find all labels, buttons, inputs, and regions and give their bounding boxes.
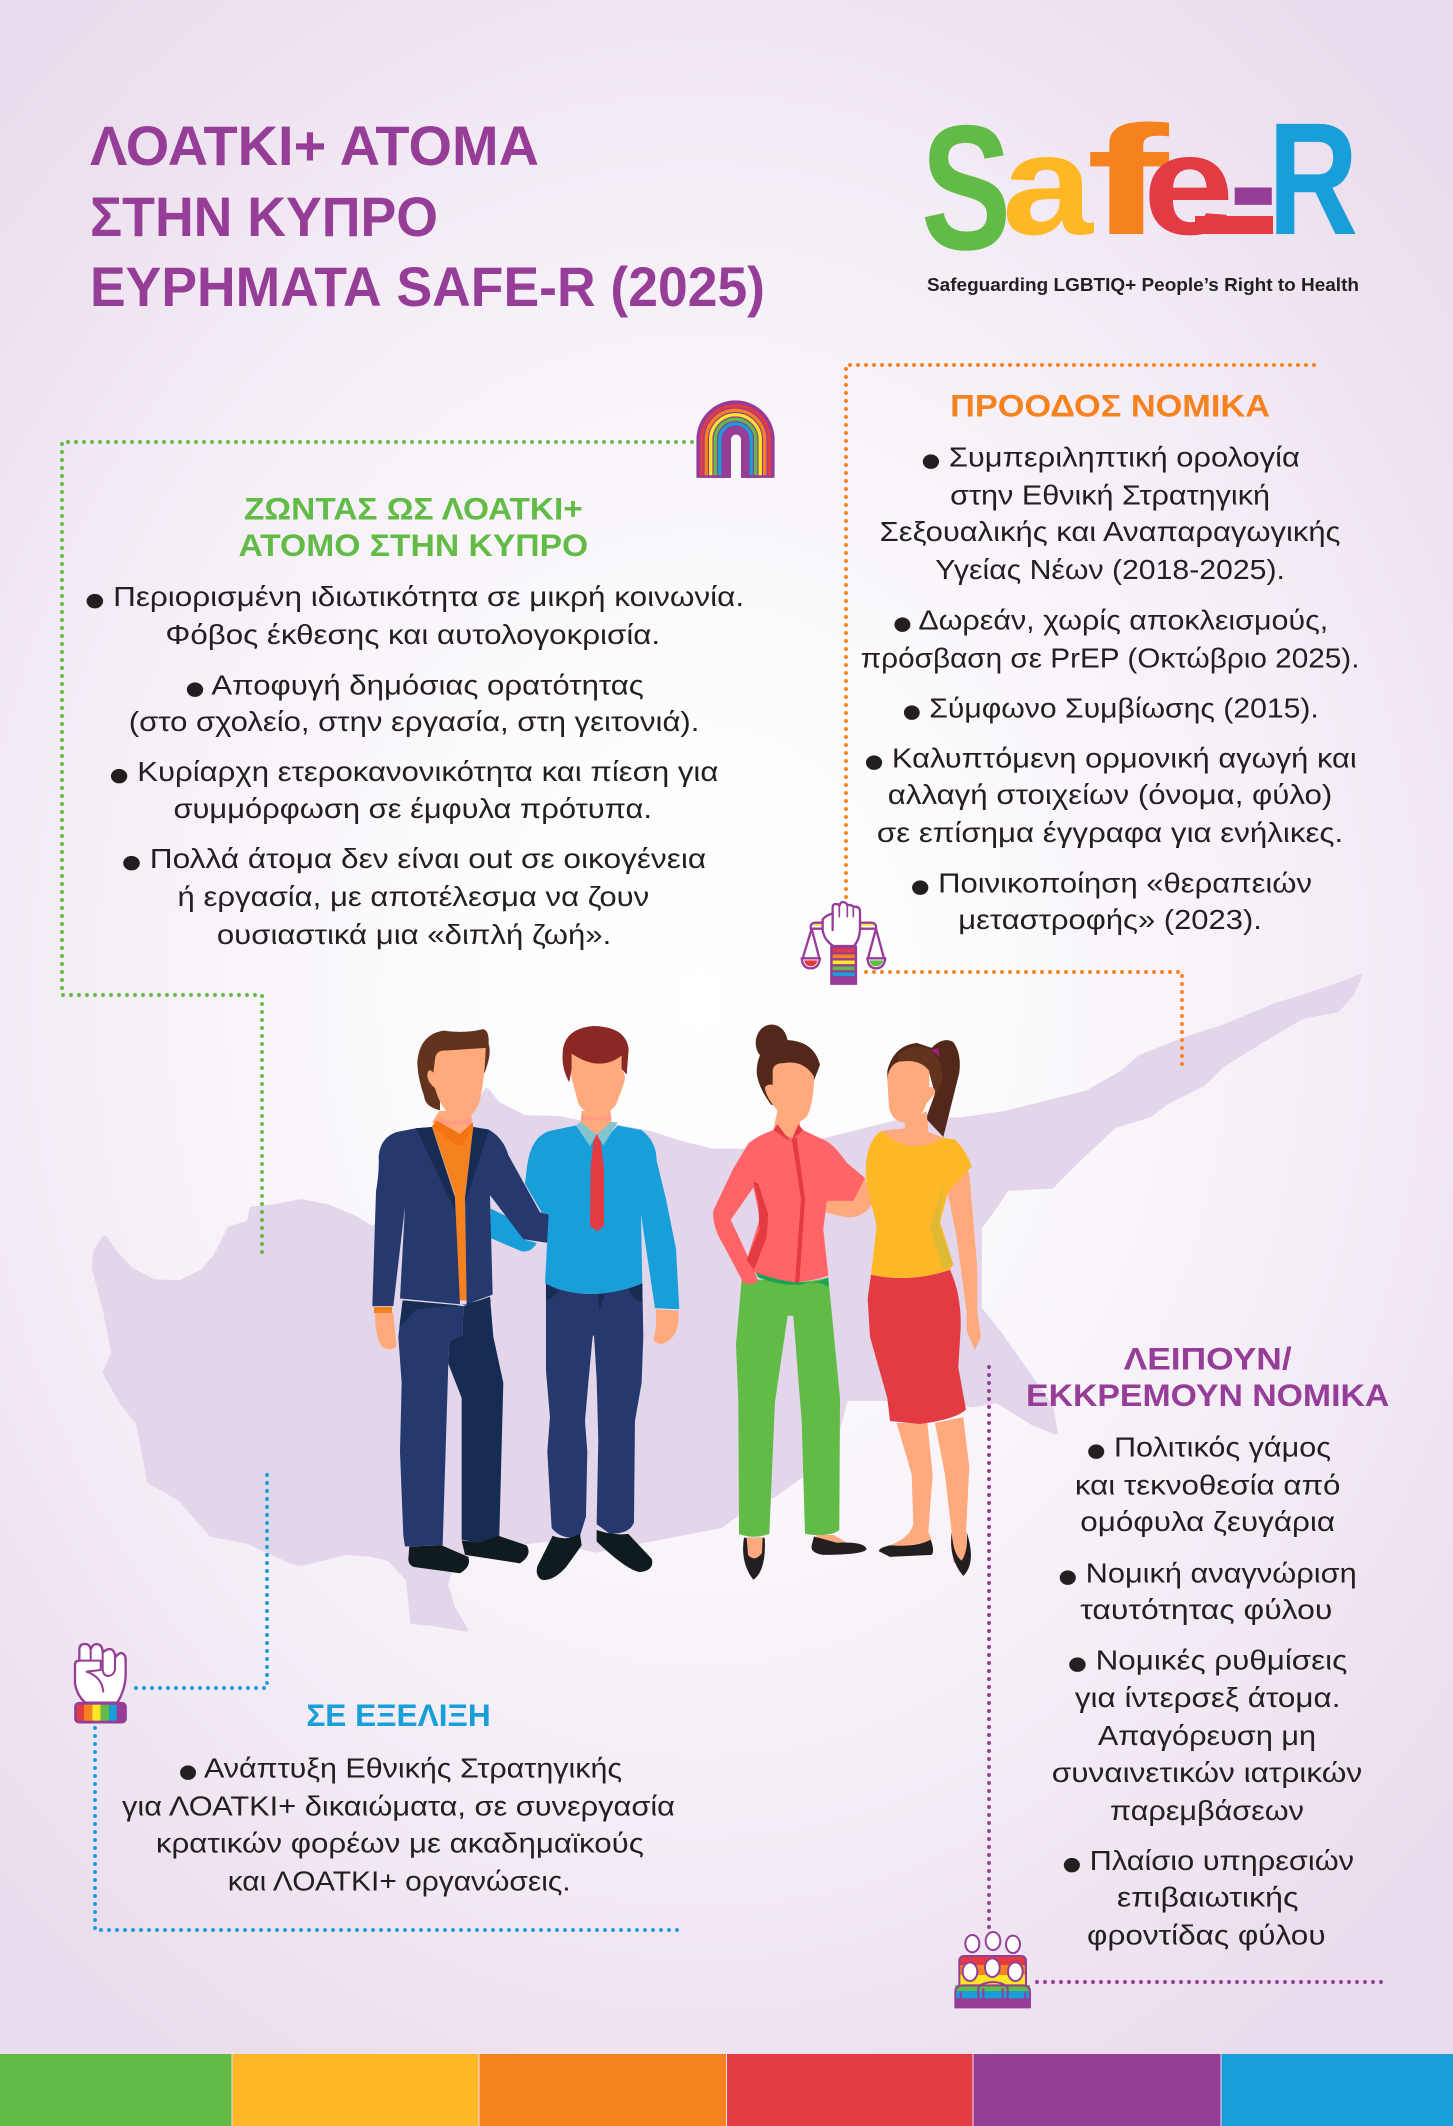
bullet list: missing or pending: και τεκνοθεσία από (1075, 1469, 1340, 1500)
heading: legal progress: ΠΡΟΟΔΟΣ ΝΟΜΙΚΑ (950, 387, 1270, 423)
bullet list: legal progress: Σεξουαλικής και Αναπαραγωγικής (880, 516, 1340, 547)
bullet list: missing or pending: ομόφυλα ζευγάρια (1080, 1506, 1335, 1537)
bullet list: legal progress: σε επίσημα έγγραφα για ενήλικες. (877, 817, 1343, 848)
bullet list: legal progress: πρόσβαση σε PrEP (Οκτώβριο 2025). (861, 642, 1359, 673)
title (90, 115, 765, 318)
bullet list: legal progress: ● Καλυπτόμενη ορμονική αγωγή και (865, 743, 1357, 774)
bullet list: living as LGBTIQ+: συμμόρφωση σε έμφυλα πρότυπα. (173, 793, 652, 824)
bullet list: legal progress: στην Εθνική Στρατηγική (950, 480, 1270, 511)
heading: living as LGBTIQ+: ΖΩΝΤΑΣ ΩΣ ΛΟΑΤΚΙ+ (244, 490, 583, 526)
bullet list: missing or pending: ● Νομική αναγνώριση (1059, 1557, 1357, 1588)
bullet list: living as LGBTIQ+ (85, 581, 744, 950)
bullet list: legal progress: μεταστροφής» (2023). (958, 904, 1262, 935)
connector: blue dotted line lower (95, 1728, 678, 1930)
bullet list: missing or pending: παρεμβάσεων (1110, 1795, 1304, 1826)
bullet list: missing or pending: συναινετικών ιατρικών (1052, 1757, 1362, 1788)
connector: orange dotted line top (846, 365, 1314, 902)
logo: Safe-R: f (1086, 94, 1170, 267)
bullet list: missing or pending: ● Πλαίσιο υπηρεσιών (1063, 1845, 1354, 1876)
text content (85, 387, 1389, 1951)
man 2 (525, 1026, 679, 1580)
heading: living as LGBTIQ+: ΑΤΟΜΟ ΣΤΗΝ ΚΥΠΡΟ (239, 527, 588, 563)
bullet list: living as LGBTIQ+: (στο σχολείο, στην εργασία, στη γειτονιά). (129, 706, 699, 737)
bullet list: legal progress: ● Σύμφωνο Συμβίωσης (2015). (903, 692, 1319, 723)
rainbow colour bar (0, 2054, 1453, 2126)
panel: living as LGBTIQ+ in Cyprus (85, 490, 744, 950)
woman 1 (713, 1024, 867, 1580)
bullet list: missing or pending: φροντίδας φύλου (1087, 1920, 1326, 1951)
heading: in progress: ΣΕ ΕΞΕΛΙΞΗ (306, 1697, 491, 1733)
logo tagline: Safeguarding LGBTIQ+ People’s Right to Health (927, 274, 1359, 295)
bullet list: living as LGBTIQ+: ● Κυρίαρχη ετεροκανονικότητα και πίεση για (110, 756, 718, 787)
map of Cyprus (94, 976, 1360, 1630)
illustration: two men (372, 1026, 679, 1580)
bullet list: living as LGBTIQ+: ουσιαστικά μια «διπλή ζωή». (217, 919, 611, 950)
woman 2 arm (825, 1178, 873, 1217)
logo: Safe-R (921, 89, 1358, 287)
bullet list: legal progress: Υγείας Νέων (2018-2025). (935, 554, 1285, 585)
icon: scales held by raised hand (802, 902, 885, 984)
bullet list: living as LGBTIQ+: Φόβος έκθεσης και αυτολογοκρισία. (165, 619, 660, 650)
connector: blue dotted line upper (130, 1475, 267, 1688)
man 1 (372, 1029, 549, 1573)
bullet list: legal progress: ● Ποινικοποίηση «θεραπειών (911, 867, 1312, 898)
woman 2 (866, 1040, 981, 1576)
bullet list: in progress (122, 1753, 675, 1896)
logo: Safe-R: e (1143, 105, 1234, 265)
logo: Safe-R: a (1002, 105, 1095, 265)
bullet list: legal progress: ● Δωρεάν, χωρίς αποκλεισμούς, (893, 604, 1328, 635)
panel: missing or pending legally (1026, 1341, 1389, 1951)
bullet list: living as LGBTIQ+: ● Αποφυγή δημόσιας ορατότητας (186, 669, 644, 700)
bullet list: living as LGBTIQ+: ή εργασία, με αποτέλεσμα να ζουν (178, 881, 649, 912)
panel: in progress (122, 1697, 675, 1896)
connector: purple dotted line horizontal (1037, 1980, 1386, 1984)
panel: legal progress (861, 387, 1359, 935)
bullet list: missing or pending: Απαγόρευση μη (1098, 1720, 1316, 1751)
title: ΣΤΗΝ ΚΥΠΡΟ (90, 186, 438, 248)
bullet list: in progress: ● Ανάπτυξη Εθνικής Στρατηγικής (179, 1753, 622, 1784)
connector: purple dotted line vertical (987, 1367, 991, 1932)
heading: missing or pending: ΛΕΙΠΟΥΝ/ (1124, 1341, 1292, 1377)
heading: missing or pending (1026, 1341, 1389, 1413)
illustration: two women (713, 1024, 981, 1580)
bullet list: missing or pending (1052, 1431, 1362, 1951)
logo: Safe-R: S (921, 89, 1011, 287)
bullet list: legal progress (861, 442, 1359, 935)
title: ΛΟΑΤΚΙ+ ΑΤΟΜΑ (90, 115, 539, 177)
logo: Safe-R: R (1268, 90, 1358, 269)
bullet list: legal progress: αλλαγή στοιχείων (όνομα, φύλο) (888, 779, 1332, 810)
bullet list: living as LGBTIQ+: ● Πολλά άτομα δεν είναι out σε οικογένεια (122, 843, 706, 874)
heading: living as LGBTIQ+ (239, 490, 588, 563)
bullet list: missing or pending: επιβαιωτικής (1117, 1882, 1298, 1913)
man 2 arm behind man 1 (491, 1209, 537, 1252)
bullet list: in progress: και ΛΟΑΤΚΙ+ οργανώσεις. (228, 1865, 571, 1896)
bullet list: missing or pending: ● Νομικές ρυθμίσεις (1068, 1644, 1347, 1675)
bullet list: missing or pending: ● Πολιτικός γάμος (1087, 1431, 1331, 1462)
title: ΕΥΡΗΜΑΤΑ SAFE-R (2025) (90, 256, 765, 318)
bullet list: missing or pending: για ίντερσεξ άτομα. (1075, 1682, 1340, 1713)
connector: green dotted line (62, 442, 692, 1254)
connector: orange dotted line lower (866, 972, 1182, 1065)
icon: rainbow (697, 401, 774, 478)
logo: Safe-R: - (1229, 102, 1278, 265)
bullet list: legal progress: ● Συμπεριληπτική ορολογία (922, 442, 1300, 473)
bullet list: in progress: κρατικών φορέων με ακαδημαϊκούς (156, 1827, 644, 1858)
bullet list: missing or pending: ταυτότητας φύλου (1080, 1594, 1332, 1625)
heading: missing or pending: ΕΚΚΡΕΜΟΥΝ ΝΟΜΙΚΑ (1026, 1377, 1389, 1413)
icon: group of people in rainbow colours (955, 1932, 1030, 2008)
bullet list: living as LGBTIQ+: ● Περιορισμένη ιδιωτικότητα σε μικρή κοινωνία. (85, 581, 744, 612)
icon: raised fist with rainbow wristband (75, 1644, 126, 1723)
bullet list: in progress: για ΛΟΑΤΚΙ+ δικαιώματα, σε συνεργασία (122, 1791, 675, 1822)
